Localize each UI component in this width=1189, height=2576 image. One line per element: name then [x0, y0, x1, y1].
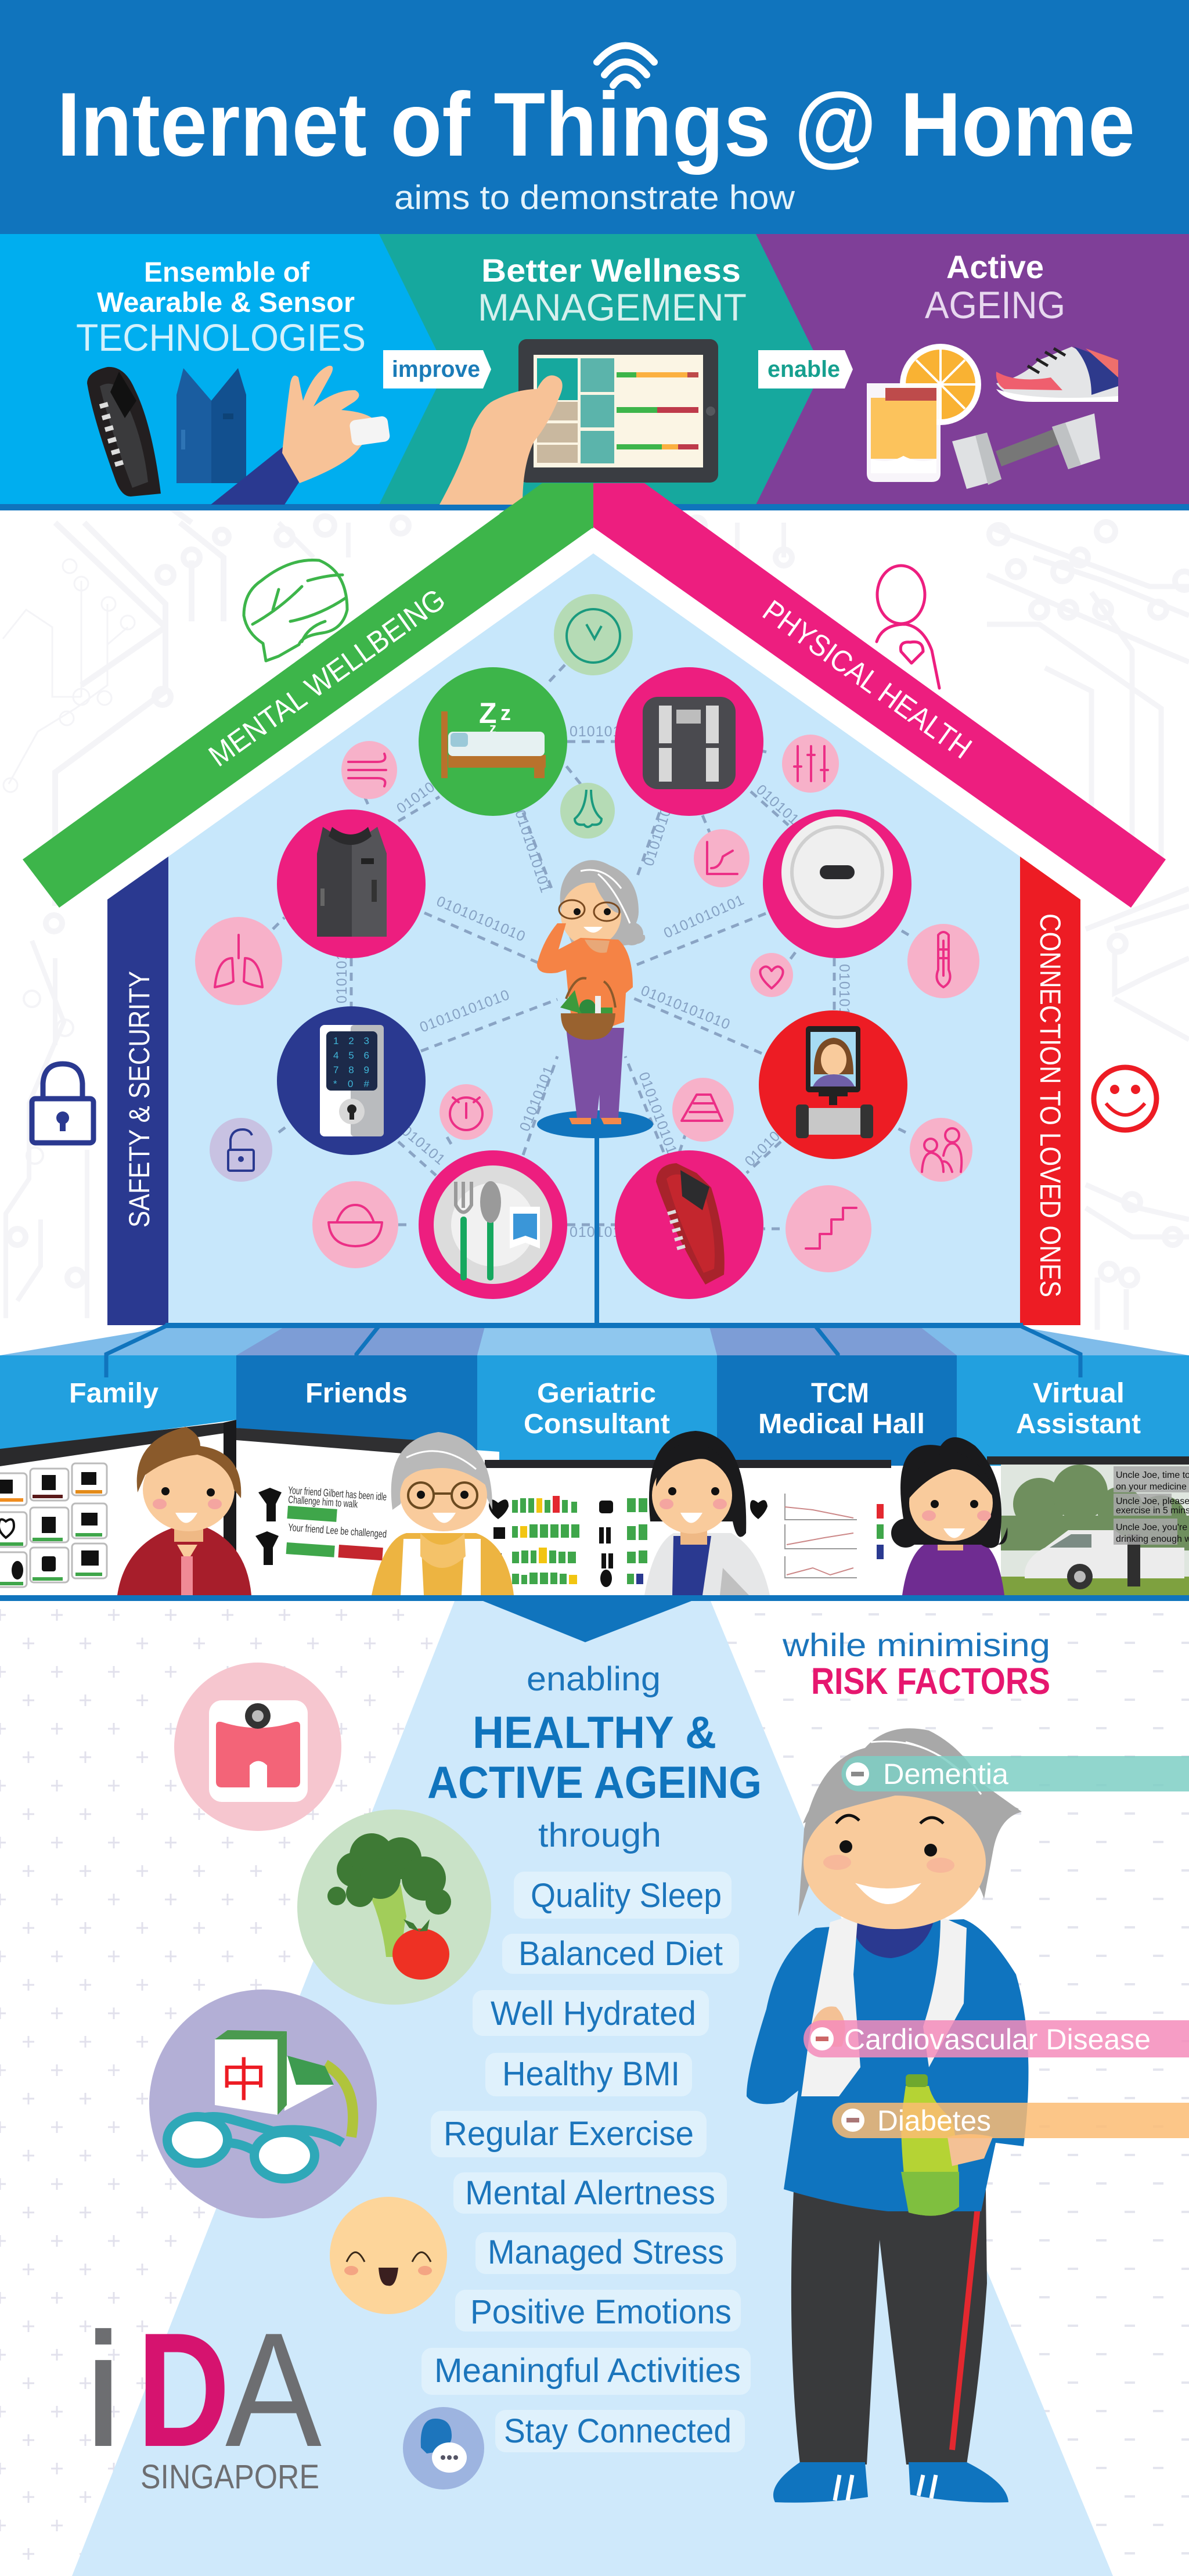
- screen: virtual assistant photo: [987, 1456, 1189, 1597]
- device: bed: z: [500, 701, 511, 725]
- title: Internet of Things @ Home: [57, 74, 1135, 175]
- data links with binary labels: 010101: [836, 964, 852, 1016]
- icon: smiley: [1094, 1067, 1156, 1130]
- device: bed: [419, 667, 567, 816]
- step 1 heading: Wearable & Sensor: [97, 287, 355, 318]
- icon: mahjong and goggles: 中: [221, 2055, 267, 2106]
- platform stem line: [594, 1127, 599, 1370]
- label: Friends: Friends: [305, 1378, 408, 1409]
- text: enabling: enabling: [527, 1660, 661, 1698]
- panel: network awning: [0, 1327, 1189, 1466]
- icon: small circle lungs: [195, 917, 282, 1005]
- screen: virtual assistant photo: on your medicine: [1116, 1482, 1187, 1492]
- device: sensor disc: [763, 810, 911, 958]
- icon: small circle heart: [750, 953, 793, 997]
- panel: connection to loved ones wall: [1020, 857, 1080, 1325]
- icon: mahjong and goggles: [149, 1989, 377, 2218]
- light beam: [72, 1601, 1113, 2576]
- screen: friends challenge: Challenge him to walk: [288, 1494, 359, 1510]
- character: elderly man exercising: [747, 1728, 1028, 2503]
- screen: family tablet: [0, 1420, 236, 1597]
- risk: dementia: [841, 1756, 1189, 1791]
- icon: chat bubbles: [403, 2407, 484, 2489]
- list: healthy ageing factors: [421, 1872, 751, 2452]
- icon: small circle bowl: [312, 1181, 398, 1268]
- label: Family: Family: [69, 1378, 158, 1409]
- header band: [0, 0, 1189, 235]
- pill: mental alertness: Mental Alertness: [465, 2174, 715, 2212]
- character: geriatric doctor: [644, 1431, 770, 1595]
- text: while minimising risk factors: while minimising: [782, 1627, 1050, 1663]
- pill: managed stress: Managed Stress: [488, 2233, 724, 2271]
- device: vest: [277, 810, 426, 958]
- label: Virtual Assistant: Assistant: [1016, 1409, 1141, 1440]
- screen: friends challenge: Your friend Gilbert has been idle: [288, 1484, 387, 1503]
- icon: person with heart: [877, 566, 939, 688]
- icon: smart vest: [176, 368, 246, 483]
- icon: small circle wind: [341, 741, 397, 799]
- pill: balanced diet: Balanced Diet: [518, 1935, 723, 1973]
- label: Geriatric Consultant: Geriatric: [537, 1378, 656, 1409]
- screen: virtual assistant photo: Uncle Joe, please: [1116, 1496, 1189, 1506]
- pill: meaningful activities: Meaningful Activities: [434, 2352, 741, 2390]
- icon: small circle clock: [554, 594, 633, 675]
- device: door lock: 4 5 6: [333, 1050, 369, 1061]
- heading: healthy and active ageing: [427, 1707, 762, 1808]
- icon: juice and orange: [867, 344, 981, 482]
- logo: iDA Singapore: D: [137, 2300, 230, 2481]
- pill: well hydrated: Well Hydrated: [491, 1995, 696, 2032]
- step 3 heading: [925, 249, 1065, 326]
- heading: healthy and active ageing: ACTIVE AGEING: [427, 1757, 762, 1808]
- arrow: enable: [758, 350, 853, 388]
- step 1 heading: [76, 257, 366, 359]
- platform: [537, 1110, 653, 1138]
- icon: small circle graph: [694, 829, 750, 887]
- panel: three step band: [0, 234, 1189, 510]
- risk: cardiovascular disease: [804, 2020, 1189, 2057]
- icon: tablet with dashboard: [518, 339, 718, 483]
- arrow: improve: improve: [392, 357, 480, 382]
- character: virtual assistant woman: [891, 1437, 1007, 1595]
- pill: quality sleep: Quality Sleep: [531, 1877, 722, 1915]
- data links with binary labels: 010101: [741, 1121, 790, 1170]
- label: Geriatric Consultant: Consultant: [524, 1409, 670, 1440]
- icon: small circle sliders: [782, 735, 839, 793]
- screen: virtual assistant photo: Uncle Joe, time to: [1116, 1470, 1189, 1480]
- screen: virtual assistant photo: exercise in 5 mins: [1116, 1506, 1189, 1516]
- logo: iDA Singapore: A: [225, 2300, 322, 2481]
- data links with binary labels: 010101: [394, 773, 445, 817]
- risk: dementia: Dementia: [883, 1758, 1008, 1790]
- icon: small circle family: [910, 1118, 972, 1182]
- icon: small circle nose: [560, 783, 615, 839]
- logo: iDA Singapore: SINGAPORE: [140, 2458, 319, 2496]
- arrow: enable: enable: [768, 357, 840, 382]
- label: Virtual Assistant: Virtual: [1033, 1378, 1125, 1409]
- icon: brain: [244, 560, 347, 661]
- pill: positive emotions: Positive Emotions: [470, 2293, 732, 2331]
- background: plus pattern: [0, 1601, 594, 2576]
- bottom rule: [0, 1595, 1189, 1601]
- panel: safety & security wall: SAFETY & SECURITY: [123, 971, 156, 1228]
- pill: healthy BMI: Healthy BMI: [502, 2055, 680, 2093]
- icon: small circle thermometer: [907, 924, 979, 998]
- logo: iDA Singapore: [87, 2300, 322, 2496]
- step 3 heading: AGEING: [925, 283, 1065, 326]
- data links with binary labels: 01010101010: [434, 893, 528, 945]
- step 1 heading: Ensemble of: [144, 257, 310, 288]
- icon: small circle stairs: [786, 1185, 871, 1272]
- heading: healthy and active ageing: HEALTHY &: [473, 1707, 716, 1758]
- icon: broccoli and apple: [297, 1809, 491, 2005]
- label: Geriatric Consultant: [524, 1378, 670, 1440]
- network connector lines: [106, 1323, 1080, 1377]
- data links with binary labels: 010101: [334, 952, 350, 1003]
- risk: cardiovascular disease: Cardiovascular Disease: [844, 2023, 1151, 2056]
- screen: friends challenge: [236, 1428, 499, 1597]
- text: while minimising risk factors: RISK FACTORS: [811, 1660, 1050, 1702]
- data links with binary labels: 01010101010: [417, 987, 512, 1036]
- icon: small circle treadmill: [672, 1078, 734, 1142]
- collar: [851, 1922, 934, 1958]
- device: door lock: * 0 #: [333, 1078, 370, 1089]
- bottle: [901, 2086, 959, 2216]
- device: telepresence robot: [759, 1010, 907, 1159]
- data links with binary labels: 01010101: [517, 1063, 557, 1134]
- data links with binary labels: 01010101010: [635, 1070, 683, 1165]
- icon: dumbbell: [952, 413, 1100, 489]
- figure: grandmother with basket: [537, 860, 645, 1124]
- label: TCM Medical Hall: [758, 1378, 925, 1440]
- data links with binary labels: 010101: [570, 1224, 621, 1240]
- icon: small circle timer: [439, 1084, 493, 1140]
- pill: regular exercise: Regular Exercise: [444, 2115, 694, 2153]
- data links with binary labels: 0101010101: [661, 891, 747, 941]
- character: grandmother friend: [372, 1432, 514, 1595]
- device: door lock: 1 2 3: [333, 1035, 369, 1046]
- arrow: down from network: [483, 1601, 691, 1642]
- data links with binary labels: [273, 665, 909, 1240]
- icon: small circle open lock: [210, 1118, 272, 1182]
- device: door lock: 7 8 9: [333, 1064, 369, 1075]
- panel: physical health roof: [593, 483, 1166, 908]
- icon: sneaker: [996, 347, 1118, 402]
- head: [798, 1728, 1022, 1916]
- icon: happy face: [330, 2197, 447, 2314]
- background: circuit pattern: [3, 494, 1189, 1330]
- pill: stay connected: Stay Connected: [504, 2412, 732, 2450]
- step 3 heading: Active: [946, 249, 1044, 285]
- icon: wifi: [597, 45, 654, 85]
- icon: padlock: [32, 1064, 93, 1143]
- background: dash pattern: [594, 1601, 1189, 2576]
- panel: mental wellbeing roof: [23, 483, 593, 908]
- data links with binary labels: 010101: [398, 1122, 449, 1168]
- sweater: [747, 1919, 1028, 2211]
- panel: physical health roof: PHYSICAL HEALTH: [756, 594, 978, 765]
- label: Virtual Assistant: [1016, 1378, 1141, 1440]
- icon: hand holding sensor: [211, 366, 391, 505]
- screen: friends challenge: Your friend Lee be challenged: [288, 1521, 387, 1540]
- data links with binary labels: 0101010: [640, 805, 675, 868]
- label: TCM Medical Hall: Medical Hall: [758, 1409, 925, 1440]
- step 2 heading: MANAGEMENT: [478, 286, 747, 329]
- screen: geriatric chart dashboard: [485, 1460, 891, 1597]
- data links with binary labels: 01010101010: [639, 983, 733, 1033]
- panel: safety & security wall: [107, 857, 168, 1325]
- trousers: [791, 2190, 987, 2465]
- character: family man: [117, 1427, 251, 1595]
- device: wearable band: [615, 1150, 763, 1299]
- step 2 heading: [478, 252, 747, 329]
- device: door lock: [277, 1006, 426, 1155]
- panel: mental wellbeing roof: MENTAL WELLBEING: [203, 582, 452, 773]
- data links with binary labels: 010101: [570, 724, 621, 740]
- step 1 heading: TECHNOLOGIES: [76, 316, 366, 359]
- device: bed: z: [489, 721, 496, 736]
- data links with binary labels: 010101: [753, 782, 802, 828]
- panel: connection to loved ones wall: CONNECTION TO LOVED ONES: [1034, 913, 1067, 1297]
- text: while minimising risk factors: [782, 1627, 1050, 1702]
- data links with binary labels: 0101010101: [511, 808, 554, 895]
- logo: iDA Singapore: i: [87, 2300, 120, 2481]
- shoes: [773, 2462, 868, 2503]
- step 2 heading: Better Wellness: [481, 252, 741, 289]
- text: through: through: [538, 1816, 661, 1854]
- subtitle: aims to demonstrate how: [394, 179, 795, 217]
- towel: [801, 1913, 860, 2096]
- device: smart scale: [615, 667, 763, 816]
- device: plate and cutlery: [419, 1150, 567, 1299]
- label: TCM Medical Hall: TCM: [811, 1378, 869, 1409]
- house interior: [168, 553, 1020, 1325]
- icon: fitness band: [87, 367, 161, 497]
- risk: diabetes: [832, 2103, 1189, 2138]
- device: bed: Z: [479, 697, 497, 729]
- arrow: improve: [383, 350, 491, 388]
- green roof top fill: [499, 483, 593, 528]
- icon: bathroom scale: [174, 1663, 341, 1831]
- icon: hand on tablet: [439, 375, 563, 505]
- risk: diabetes: Diabetes: [877, 2104, 991, 2137]
